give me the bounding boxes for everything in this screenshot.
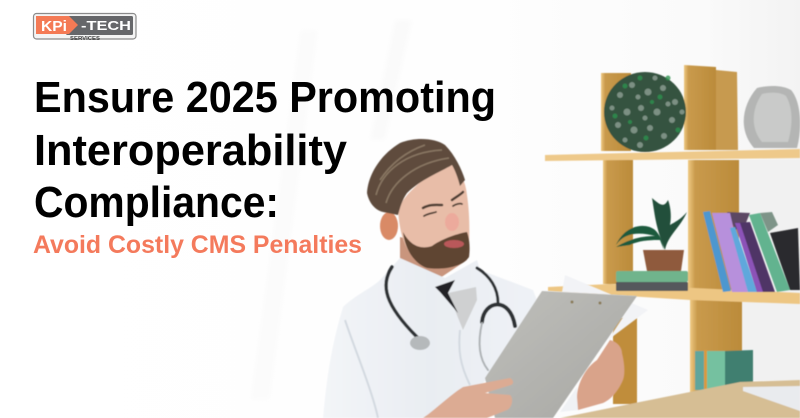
hair xyxy=(367,139,465,215)
books on lower shelf xyxy=(695,350,753,390)
mouth xyxy=(444,240,464,248)
ear xyxy=(380,212,398,240)
sleeve xyxy=(560,387,578,412)
hair streaks xyxy=(376,145,449,203)
logo: orange chevron xyxy=(36,16,78,34)
logo: KPi text: KPi xyxy=(41,18,67,35)
title xyxy=(34,73,496,227)
books leaning on shelf xyxy=(703,211,800,292)
tie xyxy=(435,280,458,313)
subtitle: Avoid Costly CMS Penalties xyxy=(33,231,362,259)
lab coat xyxy=(323,258,537,418)
plant ball xyxy=(604,72,686,152)
vase xyxy=(744,86,800,148)
eyes and brows xyxy=(423,192,463,216)
shelf uprights xyxy=(601,65,742,404)
face xyxy=(398,165,469,267)
top shelf xyxy=(545,149,800,161)
beard xyxy=(403,232,470,269)
logo: SERVICES text: SERVICES xyxy=(70,36,101,42)
title: Compliance: xyxy=(34,178,279,227)
stethoscope xyxy=(386,267,515,370)
logo: TECH text: -TECH xyxy=(81,18,131,33)
logo xyxy=(34,14,136,42)
shelving unit xyxy=(545,65,800,418)
title: Interoperability xyxy=(34,126,348,175)
coat fold shadows xyxy=(345,320,470,418)
stacked books under plant xyxy=(616,271,688,291)
second shelf xyxy=(548,284,800,304)
left hand xyxy=(423,378,513,418)
desk xyxy=(560,380,800,418)
shirt shadow xyxy=(448,287,477,330)
right hand xyxy=(577,340,624,410)
neck xyxy=(400,237,467,278)
laptop xyxy=(743,386,800,411)
title: Ensure 2025 Promoting xyxy=(34,73,496,122)
logo: gray panel xyxy=(66,16,133,35)
nose highlight xyxy=(445,213,459,231)
potted plant xyxy=(616,198,687,271)
doctor xyxy=(323,139,648,418)
paper behind clipboard xyxy=(562,275,648,340)
clipboard xyxy=(485,291,637,418)
